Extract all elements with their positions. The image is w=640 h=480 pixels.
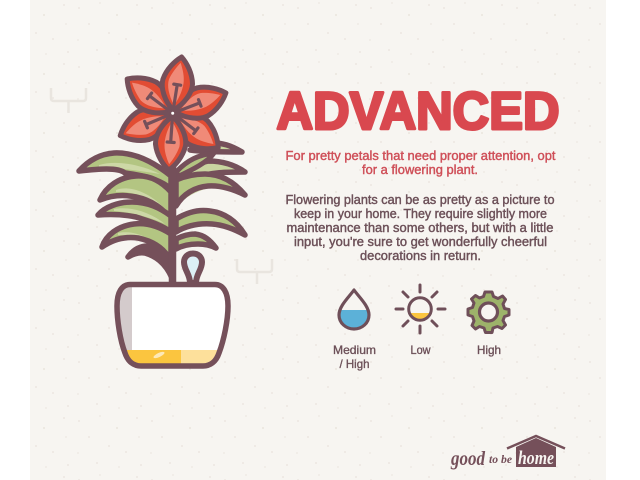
intro text: for a flowering plant.: [362, 163, 478, 177]
icon labels: [333, 343, 501, 371]
body text: Flowering plants can be as pretty as a picture to: [286, 193, 555, 207]
flower: [114, 55, 231, 171]
body text: input, you're sure to get wonderfully cheerful: [294, 235, 547, 249]
body text: maintenance than some others, but with a little: [286, 221, 554, 235]
leaves: [79, 143, 245, 278]
icon labels: Low: [410, 343, 431, 357]
body text: decorations in return.: [360, 249, 481, 263]
logo: home: [518, 448, 554, 469]
icon: gear: [468, 292, 509, 332]
intro text: For pretty petals that need proper attention, opt: [286, 149, 556, 163]
icon: sun: [396, 285, 445, 333]
icon labels: Medium: [333, 343, 376, 357]
intro text: [286, 149, 556, 177]
decorative bracket right: [237, 259, 272, 284]
icon labels: High: [477, 343, 501, 357]
pot: [117, 284, 228, 366]
body text: [286, 193, 555, 263]
logo: good: [450, 448, 486, 470]
icon labels: / High: [340, 357, 370, 371]
decorative bracket left: [51, 88, 86, 113]
body text: keep in your home. They require slightly more: [294, 207, 547, 221]
plant illustration: [79, 55, 245, 366]
stem: [169, 160, 176, 283]
hook: [184, 254, 202, 283]
logo: [450, 436, 565, 470]
title: ADVANCED: [276, 82, 560, 141]
logo: to be: [489, 452, 513, 466]
icon: water drop: [339, 290, 369, 329]
